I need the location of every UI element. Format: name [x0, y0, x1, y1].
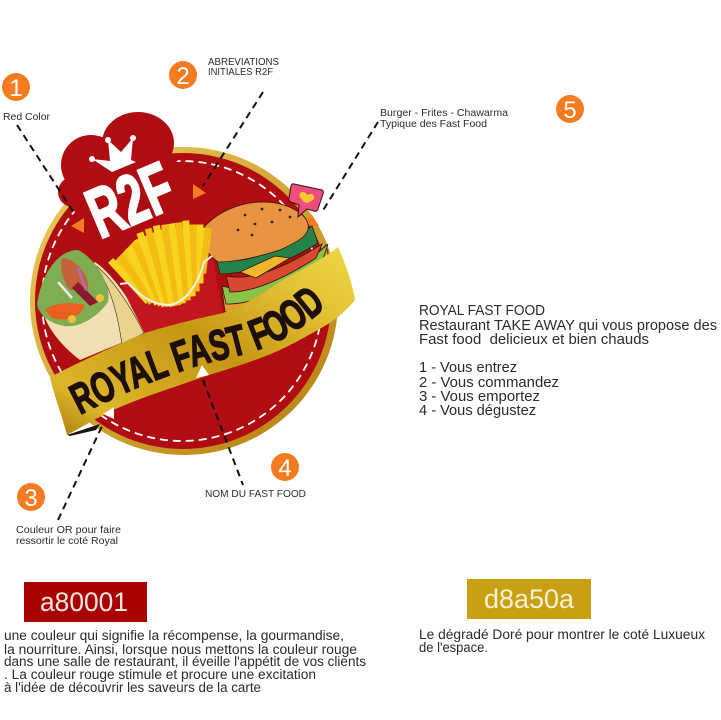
burger: [200, 202, 330, 312]
label: abbreviations: INITIALES R2F: [208, 67, 273, 78]
description block: Restaurant TAKE AWAY qui vous propose des: [419, 318, 717, 334]
description block: ROYAL FAST FOOD: [419, 303, 545, 319]
crown and R2F mark: R2F: [75, 147, 185, 253]
orange triangle markers: [71, 184, 319, 233]
ribbon tail: [67, 424, 100, 436]
label: red color: Red Color: [3, 112, 51, 123]
chat heart icon: [289, 184, 323, 217]
text: red meaning: . La couleur rouge stimule et procure une excitation: [4, 667, 316, 682]
swatch: red: [24, 582, 147, 622]
label: abbreviations: [208, 57, 279, 78]
crown cloud: [58, 112, 178, 246]
text: red meaning: [4, 628, 366, 695]
text: gold meaning: de l'espace.: [419, 640, 488, 655]
description block: 1 - Vous entrez: [419, 360, 517, 376]
text: gold meaning: [419, 627, 705, 655]
red disc: [35, 153, 331, 449]
description block: 3 - Vous emportez: [419, 389, 540, 405]
text: red meaning: dans une salle de restaurant, il éveille l'appétit de vos clients: [4, 654, 366, 669]
text: gold meaning: Le dégradé Doré pour montrer le coté Luxueux: [419, 627, 705, 642]
marker 5: 5: [563, 97, 577, 124]
badge logo: [30, 112, 355, 455]
swatch: gold: [467, 579, 591, 619]
marker 3: 3: [24, 485, 38, 512]
fries box: [120, 256, 223, 334]
marker 4: 4: [278, 455, 292, 482]
description block: 2 - Vous commandez: [419, 375, 559, 391]
swatch: gold: d8a50a: [484, 584, 575, 614]
text: red meaning: à l'idée de découvrir les saveurs de la carte: [4, 680, 261, 695]
wrap: [37, 250, 145, 360]
marker 3: [17, 483, 45, 512]
label: burger fries chawarma: [380, 108, 508, 130]
label: gold colour: Couleur OR pour faire: [16, 525, 121, 536]
gold ribbon: [50, 247, 355, 435]
swatch: red: a80001: [40, 587, 128, 617]
label: gold colour: [16, 525, 121, 547]
text: red meaning: la nourriture. Ainsi, lorsque nous mettons la couleur rouge: [4, 642, 357, 657]
description block: Fast food delicieux et bien chauds: [419, 332, 649, 348]
label: abbreviations: ABREVIATIONS: [208, 57, 279, 68]
marker 1: [2, 73, 30, 102]
dashed stitching: [42, 161, 322, 441]
marker 5: [556, 95, 584, 124]
description block: 4 - Vous dégustez: [419, 403, 536, 419]
label: burger fries chawarma: Typique des Fast Food: [380, 119, 487, 130]
marker 2: [169, 61, 197, 90]
marker 1: 1: [9, 75, 23, 102]
box rim: [120, 256, 212, 305]
text: red meaning: une couleur qui signifie la récompense, la gourmandise,: [4, 628, 344, 643]
gold ring: [30, 147, 338, 455]
ribbon lettering: ROYAL FAST FOOD: [68, 288, 322, 415]
marker 2: 2: [176, 63, 190, 90]
label: fast food name: NOM DU FAST FOOD: [205, 489, 306, 500]
marker 4: [271, 453, 299, 482]
fries: [112, 224, 210, 304]
white triangle markers: [103, 365, 209, 419]
label: gold colour: ressortir le coté Royal: [16, 536, 118, 547]
description block: [419, 303, 717, 419]
label: burger fries chawarma: Burger - Frites - Chawarma: [380, 108, 508, 119]
crown and R2F mark: [75, 135, 185, 253]
dashed leader lines: [17, 92, 378, 520]
